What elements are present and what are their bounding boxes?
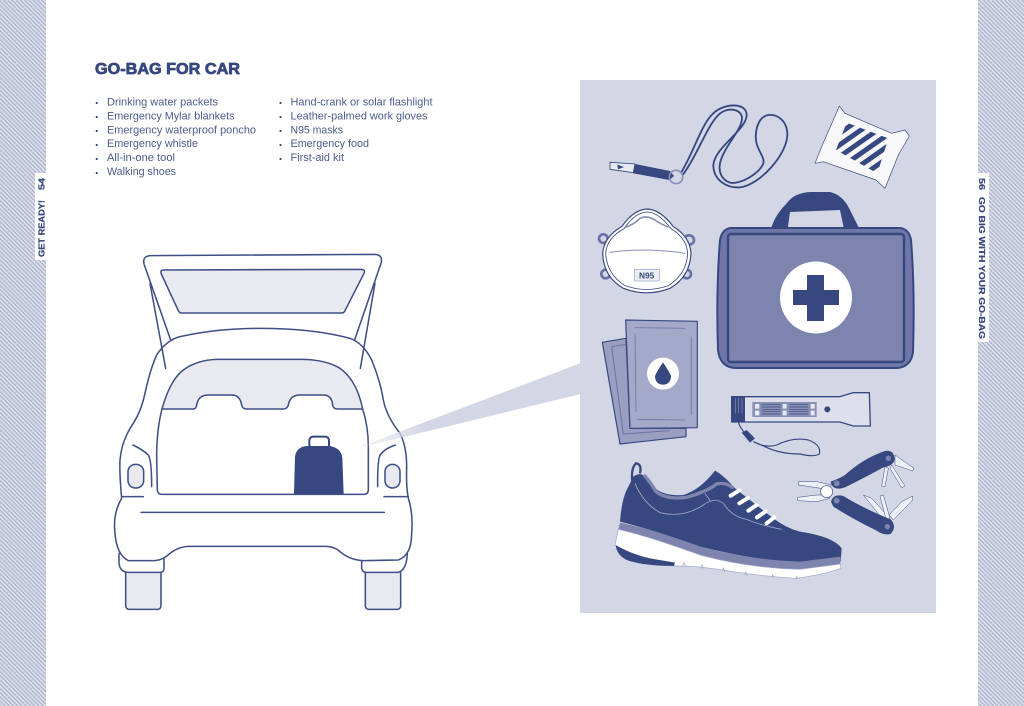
left running footer: 54	[36, 178, 46, 190]
checklist column two: First-aid kit	[290, 152, 344, 164]
checklist column two: N95 masks	[290, 124, 343, 136]
icon: walking shoe	[615, 463, 842, 579]
checklist column two: Leather-palmed work gloves	[290, 110, 428, 122]
panel: go-bag contents	[580, 80, 936, 613]
car rear view with open trunk	[115, 254, 412, 609]
checklist column one: Emergency waterproof poncho	[107, 124, 256, 136]
icon: emergency food pack	[814, 106, 910, 189]
left running footer: GET READY!	[36, 200, 46, 257]
left running footer	[35, 173, 46, 260]
checklist column one: Emergency Mylar blankets	[107, 110, 235, 122]
icons upper group	[599, 93, 909, 293]
icon: water packets	[602, 320, 697, 444]
checklist column one	[96, 96, 256, 178]
icon: whistle on lanyard	[610, 105, 787, 187]
tail lights and bumper lines	[122, 445, 408, 512]
icon: first-aid kit	[717, 192, 914, 368]
wheels	[119, 553, 407, 609]
icons middle group	[602, 320, 870, 456]
checklist column two: Hand-crank or solar flashlight	[290, 96, 432, 108]
checklist column one: Walking shoes	[107, 166, 176, 178]
icon: multi-tool	[798, 451, 914, 534]
checklist column one: Emergency whistle	[107, 138, 198, 150]
right running footer: 56	[977, 178, 987, 190]
right hatched margin	[978, 0, 1024, 706]
checklist column one: All-in-one tool	[107, 152, 175, 164]
right running footer	[977, 173, 989, 342]
icon: N95 mask: N95	[639, 270, 655, 280]
tailgate	[144, 254, 382, 342]
checklist column two: Emergency food	[290, 138, 369, 150]
car body	[115, 328, 412, 561]
checklist column one: Drinking water packets	[107, 96, 218, 108]
tailgate struts	[150, 283, 375, 368]
checklist column two	[279, 96, 432, 164]
trunk opening	[157, 359, 368, 494]
go-bag in trunk	[294, 437, 344, 494]
icon: N95 mask	[599, 209, 694, 293]
left hatched margin	[0, 0, 46, 706]
title: GO-BAG FOR CAR	[95, 61, 240, 78]
right running footer: GO BIG WITH YOUR GO-BAG	[977, 197, 987, 339]
callout beam from bag to panel	[354, 363, 581, 449]
icon: flashlight	[732, 393, 870, 456]
icons lower group	[615, 451, 914, 579]
